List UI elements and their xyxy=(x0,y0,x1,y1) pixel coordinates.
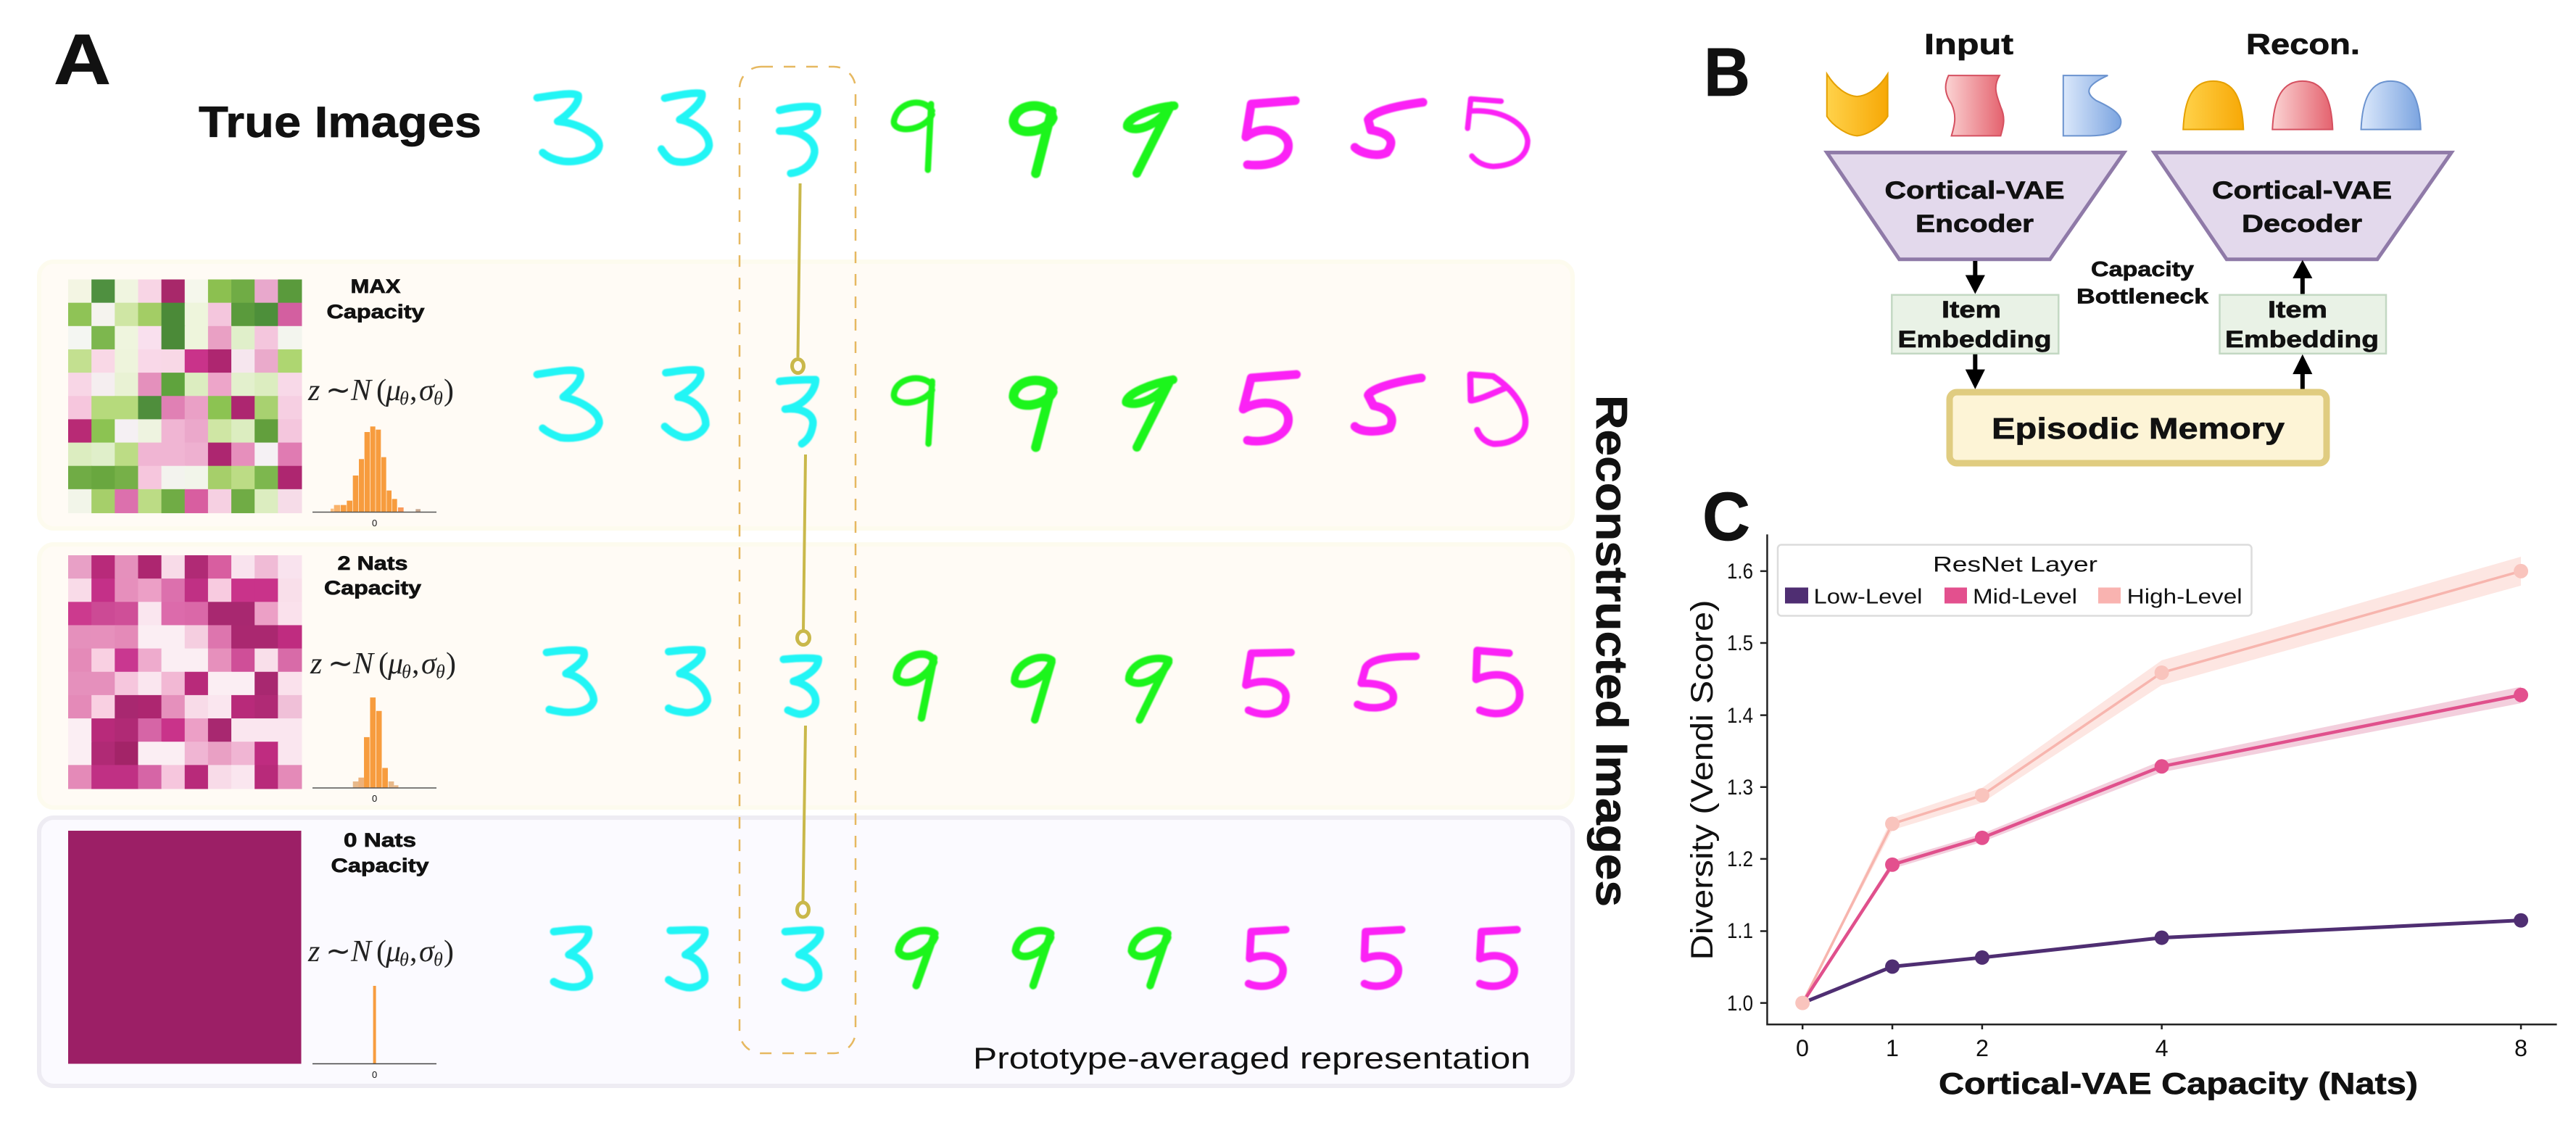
histogram: 0 nats latent values xyxy=(312,986,436,1080)
arrow: embedding to memory xyxy=(1966,354,1985,389)
formula: latent distribution: ( xyxy=(376,935,386,968)
x tick labels: 2 xyxy=(1976,1035,1989,1061)
reconstructed digits: MAX capacity xyxy=(537,370,1525,447)
label: 0 Nats Capacity: Capacity xyxy=(331,855,429,876)
heading: True Images: True Images xyxy=(199,98,481,146)
y tick labels: 1.1 xyxy=(1727,919,1753,943)
formula: latent distribution: ( xyxy=(376,374,386,407)
y tick labels: 1.3 xyxy=(1727,776,1753,800)
formula: latent distribution: μ xyxy=(385,374,401,407)
formula: latent distribution: N xyxy=(352,647,375,681)
formula: latent distribution xyxy=(307,935,454,970)
panel: 2 nats capacity row xyxy=(39,544,1573,808)
formula: latent distribution: ∼ xyxy=(326,935,351,968)
item embedding: encoder side: Embedding xyxy=(1898,326,2052,352)
reconstructed shapes xyxy=(2183,81,2421,130)
series: High-Level xyxy=(1802,557,2528,1003)
y axis title: Diversity (Vendi Score) xyxy=(1685,600,1720,960)
encoder block: Encoder xyxy=(1916,210,2034,238)
y tick labels: 1.0 xyxy=(1727,992,1753,1016)
dashed highlight box xyxy=(740,67,856,1053)
panel: architecture diagram xyxy=(1827,29,2451,463)
label: Capacity Bottleneck xyxy=(2076,258,2209,309)
formula: latent distribution xyxy=(307,374,454,409)
encoder block: Cortical-VAE xyxy=(1885,177,2065,204)
item embedding: encoder side xyxy=(1892,295,2058,354)
formula: latent distribution: θ xyxy=(399,949,409,970)
input shapes xyxy=(1827,74,2121,136)
item embedding: decoder side: Embedding xyxy=(2225,326,2379,352)
formula: latent distribution: , xyxy=(410,935,418,968)
x tick labels: 8 xyxy=(2514,1035,2527,1061)
panel C label: C xyxy=(1702,478,1750,555)
y tick labels: 1.4 xyxy=(1727,704,1753,728)
item embedding: encoder side: Item xyxy=(1942,296,2001,323)
formula: latent distribution: ) xyxy=(446,647,456,681)
histogram: MAX capacity latent values: 0 xyxy=(372,518,377,528)
arrow: embedding to decoder xyxy=(2293,260,2312,294)
vertical label: Reconstructed Images: Reconstructed Images xyxy=(1587,395,1636,907)
formula: latent distribution: , xyxy=(410,374,418,407)
label: 2 Nats Capacity: 2 Nats xyxy=(338,552,407,574)
formula: latent distribution: θ xyxy=(434,949,443,970)
encoder block xyxy=(1827,152,2124,260)
formula: latent distribution: N xyxy=(350,935,373,968)
heading: Input: Input xyxy=(1924,29,2013,61)
formula: latent distribution: ) xyxy=(444,374,454,407)
formula: latent distribution: σ xyxy=(419,374,436,407)
episodic memory box xyxy=(1950,392,2327,463)
heatmap: 0 nats latent xyxy=(68,831,302,1064)
label: 2 Nats Capacity xyxy=(324,552,421,599)
panel B label: B xyxy=(1704,34,1750,111)
panel A label: A xyxy=(54,20,111,99)
histogram: MAX capacity latent values xyxy=(312,426,436,528)
formula: latent distribution: z xyxy=(307,374,320,407)
formula: latent distribution xyxy=(310,647,456,682)
decoder block xyxy=(2154,152,2451,260)
y tick labels: 1.5 xyxy=(1727,631,1753,655)
heading: Recon.: Recon. xyxy=(2246,29,2360,61)
formula: latent distribution: N xyxy=(350,374,373,407)
arrow: encoder to embedding xyxy=(1966,261,1985,294)
label: MAX Capacity xyxy=(326,275,425,323)
item embedding: decoder side xyxy=(2220,295,2386,354)
x tick labels: 4 xyxy=(2155,1035,2169,1061)
x tick labels: 1 xyxy=(1886,1035,1899,1061)
formula: latent distribution: θ xyxy=(436,661,445,682)
label: MAX Capacity: Capacity xyxy=(326,301,425,323)
episodic memory box: Episodic Memory xyxy=(1992,412,2285,445)
formula: latent distribution: θ xyxy=(402,661,411,682)
legend xyxy=(1778,545,2252,616)
formula: latent distribution: z xyxy=(310,647,322,681)
formula: latent distribution: σ xyxy=(421,647,438,681)
series: Mid-Level xyxy=(1802,686,2528,1003)
arrow: memory to embedding xyxy=(2293,354,2312,389)
formula: latent distribution: z xyxy=(307,935,320,968)
y tick labels xyxy=(1727,560,1753,1016)
label: 0 Nats Capacity: 0 Nats xyxy=(344,829,416,851)
item embedding: decoder side: Item xyxy=(2268,296,2327,323)
true image digits xyxy=(537,93,1528,173)
decoder block: Cortical-VAE xyxy=(2212,177,2392,204)
series: Low-Level xyxy=(1795,913,2528,1010)
y tick labels: 1.2 xyxy=(1727,847,1753,871)
axes xyxy=(1760,534,2557,1029)
formula: latent distribution: μ xyxy=(387,647,403,681)
formula: latent distribution: σ xyxy=(419,935,436,968)
formula: latent distribution: ∼ xyxy=(328,647,353,681)
reconstructed digits: 0 nats capacity xyxy=(554,929,1517,987)
reconstructed digits: 2 nats capacity xyxy=(547,649,1520,720)
panel: 0 nats capacity row xyxy=(39,818,1573,1086)
label: 2 Nats Capacity: Capacity xyxy=(324,577,421,599)
label: MAX Capacity: MAX xyxy=(351,275,400,297)
formula: latent distribution: θ xyxy=(434,388,443,409)
x axis title: Cortical-VAE Capacity (Nats) xyxy=(1939,1066,2418,1100)
histogram: 2 nats latent values: 0 xyxy=(372,793,377,804)
line chart: diversity vs capacity xyxy=(1685,534,2557,1100)
formula: latent distribution: ∼ xyxy=(326,374,351,407)
connector lines linking the highlighted digit across rows xyxy=(792,183,809,917)
panel: MAX capacity row xyxy=(39,262,1573,528)
legend: High-Level xyxy=(2127,585,2242,608)
y tick labels: 1.6 xyxy=(1727,560,1753,584)
heatmap: MAX capacity latent xyxy=(68,280,302,513)
x tick labels xyxy=(1796,1035,2527,1061)
histogram: 0 nats latent values: 0 xyxy=(372,1069,377,1080)
histogram: 2 nats latent values xyxy=(312,697,436,804)
label: 0 Nats Capacity xyxy=(331,829,429,876)
formula: latent distribution: μ xyxy=(385,935,401,968)
legend: Mid-Level xyxy=(1973,585,2077,608)
heatmap: 2 nats latent xyxy=(68,555,302,789)
x tick labels: 0 xyxy=(1796,1035,1809,1061)
formula: latent distribution: θ xyxy=(399,388,409,409)
caption: prototype-averaged representation: Prototype-averaged representation xyxy=(973,1041,1531,1075)
legend: Low-Level xyxy=(1814,585,1923,608)
decoder block: Decoder xyxy=(2242,210,2362,238)
legend: ResNet Layer xyxy=(1933,552,2097,577)
formula: latent distribution: , xyxy=(412,647,419,681)
formula: latent distribution: ( xyxy=(378,647,389,681)
label: Capacity Bottleneck: Bottleneck xyxy=(2076,286,2209,309)
label: Capacity Bottleneck: Capacity xyxy=(2091,258,2194,281)
formula: latent distribution: ) xyxy=(444,935,454,968)
